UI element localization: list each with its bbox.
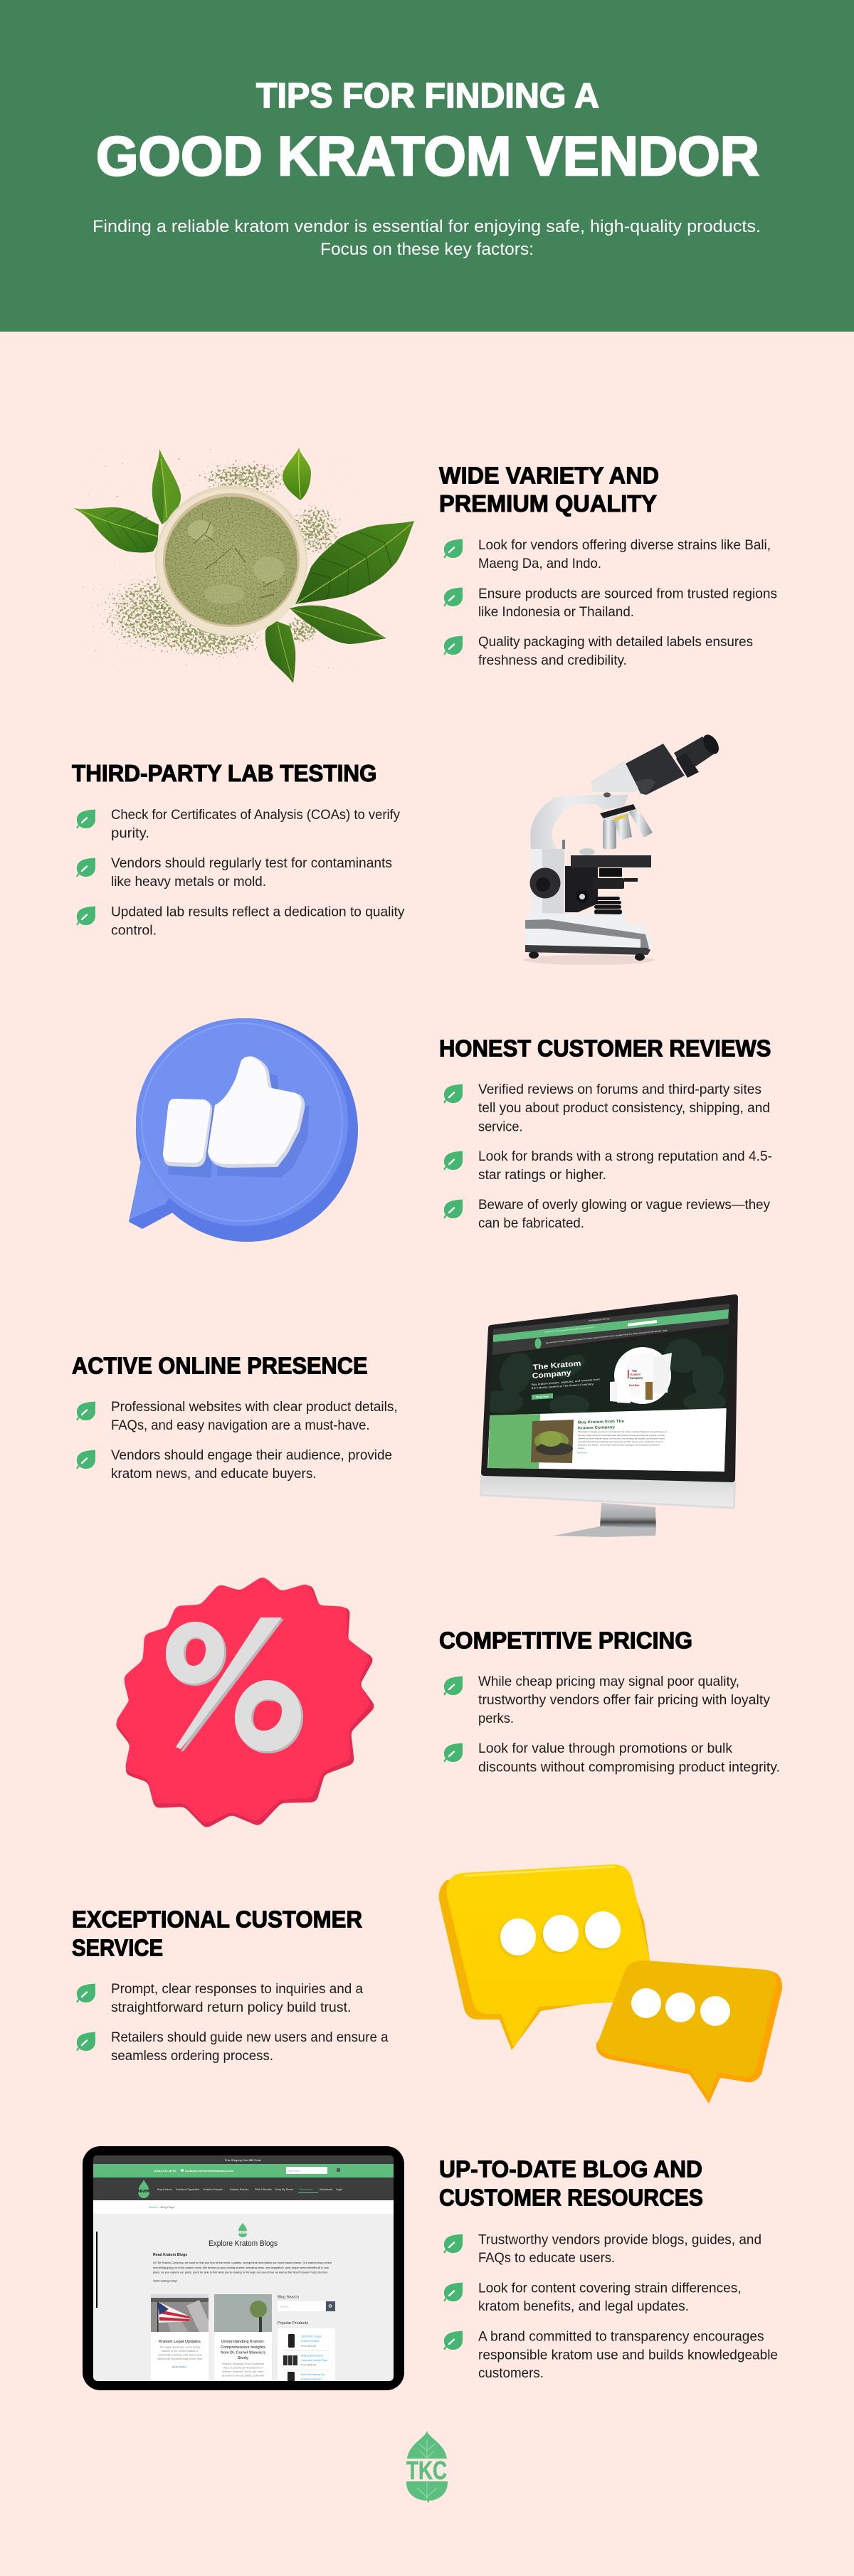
blog sidebar: From $20.00 bbox=[301, 2345, 316, 2348]
heading: THIRD-PARTY LAB TESTING bbox=[72, 761, 377, 787]
heading: CUSTOMER RESOURCES bbox=[439, 2185, 703, 2212]
blog card: legal updates: READ MORE » bbox=[172, 2365, 187, 2368]
bullet text: While cheap pricing may signal poor quality, bbox=[478, 1674, 739, 1689]
hero heading: the industry experts at The Kratom Company. bbox=[532, 1383, 594, 1390]
bullet text: Beware of overly glowing or vague reviews—they bbox=[478, 1198, 770, 1213]
bullet text bbox=[478, 1082, 770, 1134]
site logo bbox=[138, 2180, 149, 2198]
heading: HONEST CUSTOMER REVIEWS bbox=[439, 1036, 771, 1062]
bullet text: like heavy metals or mold. bbox=[111, 875, 266, 890]
site section text: service... bbox=[578, 1447, 586, 1450]
hero heading: Buy kratom powder, capsules, and extracts from bbox=[532, 1378, 600, 1386]
blog logo: TKC bbox=[238, 2231, 248, 2235]
bullet text: discounts without compromising product integrity. bbox=[478, 1761, 780, 1775]
blog sidebar: Kratom Extract bbox=[301, 2340, 319, 2343]
bullet text bbox=[111, 905, 405, 938]
bullet text: FAQs, and easy navigation are a must-have. bbox=[111, 1418, 370, 1433]
bullet text: Vendors should engage their audience, provide bbox=[111, 1448, 392, 1463]
intro text: Focus on these key factors: bbox=[320, 240, 534, 259]
site navigation: Shop By Strain bbox=[275, 2188, 293, 2191]
bullet text: Look for value through promotions or bulk bbox=[478, 1741, 732, 1756]
site navigation text: (734) 671-8797 customer.service@thekratomco.com bbox=[544, 1326, 594, 1334]
icon: leaf bullet bbox=[76, 1402, 95, 1420]
blog intro text: place. As you explore our posts, you'll be able to find what you're looking for through our search bar as well as the Most Popular Posts shortcut. bbox=[153, 2271, 328, 2274]
site navigation bbox=[157, 2188, 342, 2193]
bullet text: Professional websites with clear product details, bbox=[111, 1400, 398, 1415]
site logo: TKC bbox=[138, 2187, 149, 2194]
icon: leaf bullet bbox=[443, 636, 463, 655]
blog sidebar: Capsules Variety Pack bbox=[301, 2359, 327, 2362]
icon: leaf bullet bbox=[443, 2331, 463, 2350]
bullet text: like Indonesia or Thailand. bbox=[478, 605, 634, 620]
icon: leaf bullet bbox=[443, 2234, 463, 2253]
site navigation: Kratom Powder bbox=[204, 2188, 223, 2191]
bullet text: A brand committed to transparency encourages bbox=[478, 2330, 764, 2344]
icon: leaf bullet bbox=[76, 1450, 95, 1469]
blog card: understanding kratom: Western markets. As its use rises, bbox=[222, 2370, 264, 2373]
blog intro text: Read Kratom Blogs bbox=[153, 2253, 187, 2257]
bullet text: kratom benefits, and legal updates. bbox=[478, 2299, 689, 2314]
image: red percent badge bbox=[119, 1580, 371, 1825]
bullet text: Retailers should guide new users and ensure a bbox=[111, 2030, 389, 2045]
site navigation: Pick 5 Bundle bbox=[255, 2188, 272, 2191]
blog card: understanding kratom: Comprehensive Insights bbox=[221, 2345, 265, 2350]
icon: leaf bullet bbox=[443, 2283, 463, 2301]
bullet text: Trustworthy vendors provide blogs, guides, and bbox=[478, 2233, 761, 2247]
large chat bubble bbox=[439, 1864, 658, 2050]
bullet text: Maeng Da, and Indo. bbox=[478, 556, 601, 571]
bullet text: Prompt, clear responses to inquiries and a bbox=[111, 1982, 363, 1997]
heading: PREMIUM QUALITY bbox=[439, 491, 657, 517]
bullet text: can be fabricated. bbox=[478, 1216, 584, 1231]
blog title: Explore Kratom Blogs bbox=[209, 2239, 278, 2248]
image: desktop monitor showing website: The bbox=[632, 1369, 638, 1373]
icon: leaf bullet bbox=[443, 1677, 463, 1695]
bullet text: straightforward return policy build trust. bbox=[111, 2000, 351, 2015]
bullet text bbox=[111, 856, 392, 890]
icon: leaf bullet bbox=[76, 2032, 95, 2051]
image: yellow chat bubbles bbox=[439, 1864, 782, 2103]
blog card: legal updates: constantly evolving, with states and bbox=[158, 2354, 201, 2357]
bullet text: tell you about product consistency, shipping, and bbox=[478, 1101, 770, 1116]
heading bbox=[439, 2157, 703, 2212]
breadcrumb bbox=[149, 2206, 174, 2209]
icon: leaf bullet bbox=[443, 1743, 463, 1762]
site contact row bbox=[154, 2167, 340, 2174]
title line 2: GOOD KRATOM VENDOR bbox=[96, 125, 759, 187]
site section text: Kratom Company bbox=[578, 1425, 616, 1430]
site navigation: Wholesale bbox=[320, 2188, 332, 2191]
bullet text: freshness and credibility. bbox=[478, 653, 627, 668]
site contact row: customer.service@thekratomco.com bbox=[185, 2170, 233, 2173]
bullet text: service. bbox=[478, 1120, 522, 1134]
panel: honest customer reviews bbox=[129, 1018, 772, 1242]
site section text: The Kratom Company is here to revolutionize the kratom industry. Rigorous research led us to bbox=[578, 1430, 668, 1433]
bullet text: control. bbox=[111, 924, 157, 938]
site section text: expertly harvested and ethically sourced. Here at TKC, we put your needs first. If you're bbox=[578, 1440, 664, 1443]
bullet text bbox=[478, 1198, 770, 1231]
heading: ACTIVE ONLINE PRESENCE bbox=[72, 1353, 367, 1379]
small chat bubble bbox=[596, 1960, 782, 2103]
icon: leaf bullet bbox=[443, 1084, 463, 1103]
site navigation text bbox=[544, 1317, 668, 1344]
blog card: understanding kratom: Asia, is quickly gaining traction in bbox=[223, 2367, 263, 2370]
blog intro text: At The Kratom Company, we want to help you find all the news, updates, and general information you need about kratom. Our kratom blog covers bbox=[153, 2261, 332, 2264]
site navigation: Kratom Capsules bbox=[176, 2188, 199, 2191]
breadcrumb: Home bbox=[149, 2205, 158, 2209]
bullet text bbox=[111, 2030, 389, 2064]
logo: TKC leaf: TKC bbox=[406, 2456, 447, 2485]
blog intro text: Start reading today! bbox=[153, 2280, 177, 2283]
blog card: understanding kratom: questions about safety, potential bbox=[222, 2374, 264, 2377]
site navigation: Resources bbox=[300, 2188, 312, 2191]
bullet text bbox=[478, 2233, 761, 2266]
bullet text bbox=[111, 1982, 363, 2015]
bullet text: Look for content covering strain differences, bbox=[478, 2281, 742, 2296]
icon: leaf bullet bbox=[76, 1984, 95, 2002]
blog card: understanding kratom: Study bbox=[238, 2356, 248, 2360]
bullet text: kratom news, and educate buyers. bbox=[111, 1467, 316, 1482]
site navigation: Buy Kratom bbox=[157, 2188, 172, 2191]
bullet text bbox=[478, 1149, 772, 1183]
site navigation text: Buy Kratom Kratom Capsules Kratom Powder Kratom Extract Pick 5 Bundle Shop By Strain Resources Wholesale Login bbox=[546, 1329, 668, 1344]
heading: UP-TO-DATE BLOG AND bbox=[439, 2157, 702, 2183]
site section text: Read More bbox=[577, 1452, 587, 1455]
blog sidebar: Kratom Capsules bbox=[301, 2378, 322, 2381]
blog card: legal updates: The legal landscape surrounding bbox=[159, 2345, 200, 2348]
hero heading: The Kratom bbox=[532, 1359, 581, 1372]
blog intro text bbox=[153, 2253, 332, 2283]
heading: COMPETITIVE PRICING bbox=[439, 1628, 692, 1654]
bullet text: seamless ordering process. bbox=[111, 2049, 273, 2064]
image: kratom powder bowl with leaves bbox=[73, 448, 414, 683]
bullet text: star ratings or higher. bbox=[478, 1168, 606, 1183]
bullet text: Ensure products are sourced from trusted regions bbox=[478, 586, 777, 602]
blog sidebar: Search... bbox=[280, 2306, 290, 2308]
site section text: Buy Kratom from The bbox=[578, 1420, 624, 1425]
icon: leaf bullet bbox=[76, 907, 95, 925]
image: microscope bbox=[524, 732, 722, 965]
panel: wide variety and premium quality bbox=[73, 448, 777, 683]
site navigation: Login bbox=[336, 2188, 342, 2191]
bullet text: FAQs to educate users. bbox=[478, 2251, 615, 2266]
image: tablet showing blog page bbox=[83, 2146, 404, 2390]
heading: EXCEPTIONAL CUSTOMER bbox=[72, 1907, 362, 1933]
site contact row: (734) 671-8797 bbox=[154, 2170, 176, 2173]
bullet text: customers. bbox=[478, 2366, 544, 2381]
blog sidebar bbox=[278, 2296, 335, 2382]
icon: leaf bullet bbox=[76, 858, 95, 877]
bullet text: purity. bbox=[111, 826, 149, 841]
site section text: looking to buy kratom, we promise trusted kratom products and exceptional customer bbox=[578, 1443, 660, 1446]
icon: leaf bullet bbox=[76, 810, 95, 828]
blog card: understanding kratom: Kratom, originally from Southeast bbox=[222, 2363, 264, 2365]
bullet text: perks. bbox=[478, 1711, 514, 1726]
header banner bbox=[0, 0, 854, 332]
image: desktop monitor showing website: Kratom bbox=[631, 1372, 640, 1376]
bullet text bbox=[478, 635, 753, 668]
icon: leaf bullet bbox=[443, 1200, 463, 1218]
intro text: Finding a reliable kratom vendor is essential for enjoying safe, high-quality products. bbox=[93, 217, 761, 236]
blog card: understanding kratom bbox=[214, 2294, 272, 2381]
blog sidebar: Popular Products bbox=[278, 2321, 308, 2326]
image: desktop monitor showing website bbox=[480, 1297, 735, 1537]
site navigation text: Free Shipping Over $50 Order bbox=[589, 1317, 610, 1322]
blog sidebar: Maeng Da Kratom bbox=[301, 2354, 323, 2357]
blog card: understanding kratom: from Dr. Cornel Stanciu's bbox=[221, 2351, 265, 2355]
heading bbox=[72, 1907, 362, 1961]
bullet text bbox=[478, 2281, 742, 2314]
bullet text: Look for vendors offering diverse strains like Bali, bbox=[478, 538, 771, 553]
bullet text bbox=[478, 586, 777, 620]
logo: TKC leaf bbox=[406, 2430, 448, 2503]
bullet text bbox=[111, 1448, 392, 1482]
blog sidebar: From $65.00 bbox=[301, 2364, 316, 2367]
bullet text: trustworthy vendors offer fair pricing with loyalty bbox=[478, 1693, 771, 1708]
image: desktop monitor showing website: Company bbox=[630, 1376, 643, 1380]
site section text: the best kratom farms in South East Asia. We pride to provide a product far superior to those bbox=[578, 1434, 665, 1437]
panel: up-to-date blog and customer resources bbox=[83, 2146, 778, 2390]
panel: third-party lab testing bbox=[72, 732, 722, 965]
image: desktop monitor showing website: Red Bali bbox=[629, 1384, 639, 1387]
bullet text: Updated lab results reflect a dedication to quality bbox=[111, 905, 405, 919]
site section text bbox=[577, 1420, 668, 1455]
bullet text: Vendors should regularly test for contaminants bbox=[111, 856, 392, 871]
bullet text bbox=[111, 808, 400, 841]
blog card: legal updates: kratom in the United States is bbox=[162, 2350, 198, 2353]
blog sidebar: Red Vein Maeng Da bbox=[301, 2373, 325, 2376]
site navigation: Kratom Extract bbox=[230, 2188, 248, 2191]
heading bbox=[439, 463, 659, 517]
panel: active online presence bbox=[72, 1297, 735, 1537]
breadcrumb: » Blog Page bbox=[158, 2205, 175, 2209]
blog intro text: everything going on in the kratom world. We review up-and-coming studies, breaking news, new legislation, and unique strain benefits all in one bbox=[153, 2266, 329, 2269]
bullet text: Look for brands with a strong reputation and 4.5- bbox=[478, 1149, 772, 1164]
hero heading bbox=[531, 1362, 599, 1389]
bullet text: Quality packaging with detailed labels ensures bbox=[478, 635, 753, 650]
bullet text: responsible kratom use and builds knowledgeable bbox=[478, 2348, 778, 2363]
blog card: legal updates bbox=[151, 2294, 209, 2381]
site section text: offered by other brands today, and we do it by stocking all-natural, pure kratom that's bbox=[578, 1437, 665, 1440]
blog logo bbox=[238, 2223, 248, 2237]
icon: leaf bullet bbox=[443, 588, 463, 606]
intro text bbox=[93, 217, 761, 259]
icon: leaf bullet bbox=[443, 1151, 463, 1170]
bullet text bbox=[478, 1674, 771, 1726]
icon: leaf bullet bbox=[443, 539, 463, 558]
heading: SERVICE bbox=[72, 1935, 163, 1961]
bullet text: Verified reviews on forums and third-party sites bbox=[478, 1082, 761, 1097]
site contact row: Type Here... bbox=[288, 2170, 302, 2173]
image: desktop monitor showing website: Shop Now bbox=[536, 1395, 549, 1398]
bullet text bbox=[478, 1741, 780, 1775]
blog sidebar: 15ml RED Liquid bbox=[301, 2335, 321, 2338]
blog sidebar: Blog Search bbox=[278, 2296, 299, 2300]
heading: WIDE VARIETY AND bbox=[439, 463, 659, 490]
bullet text bbox=[478, 2330, 778, 2381]
site top bar text: Free Shipping Over $50 Order bbox=[225, 2159, 262, 2162]
panel: competitive pricing bbox=[119, 1580, 780, 1825]
blog card: understanding kratom: Understanding Kratom: bbox=[221, 2340, 265, 2344]
image: thumbs up speech bubble bbox=[129, 1018, 358, 1242]
panel: exceptional customer service bbox=[72, 1864, 782, 2103]
blog card: legal updates: Kratom Legal Updates bbox=[159, 2340, 201, 2344]
hero heading: Company bbox=[532, 1368, 571, 1381]
title line 1: TIPS FOR FINDING A bbox=[256, 77, 599, 115]
bullet text bbox=[111, 1400, 398, 1433]
blog card: legal updates: cities both implementing either new bbox=[157, 2358, 202, 2360]
bullet text bbox=[478, 538, 771, 571]
bullet text: Check for Certificates of Analysis (COAs) to verify bbox=[111, 808, 400, 823]
